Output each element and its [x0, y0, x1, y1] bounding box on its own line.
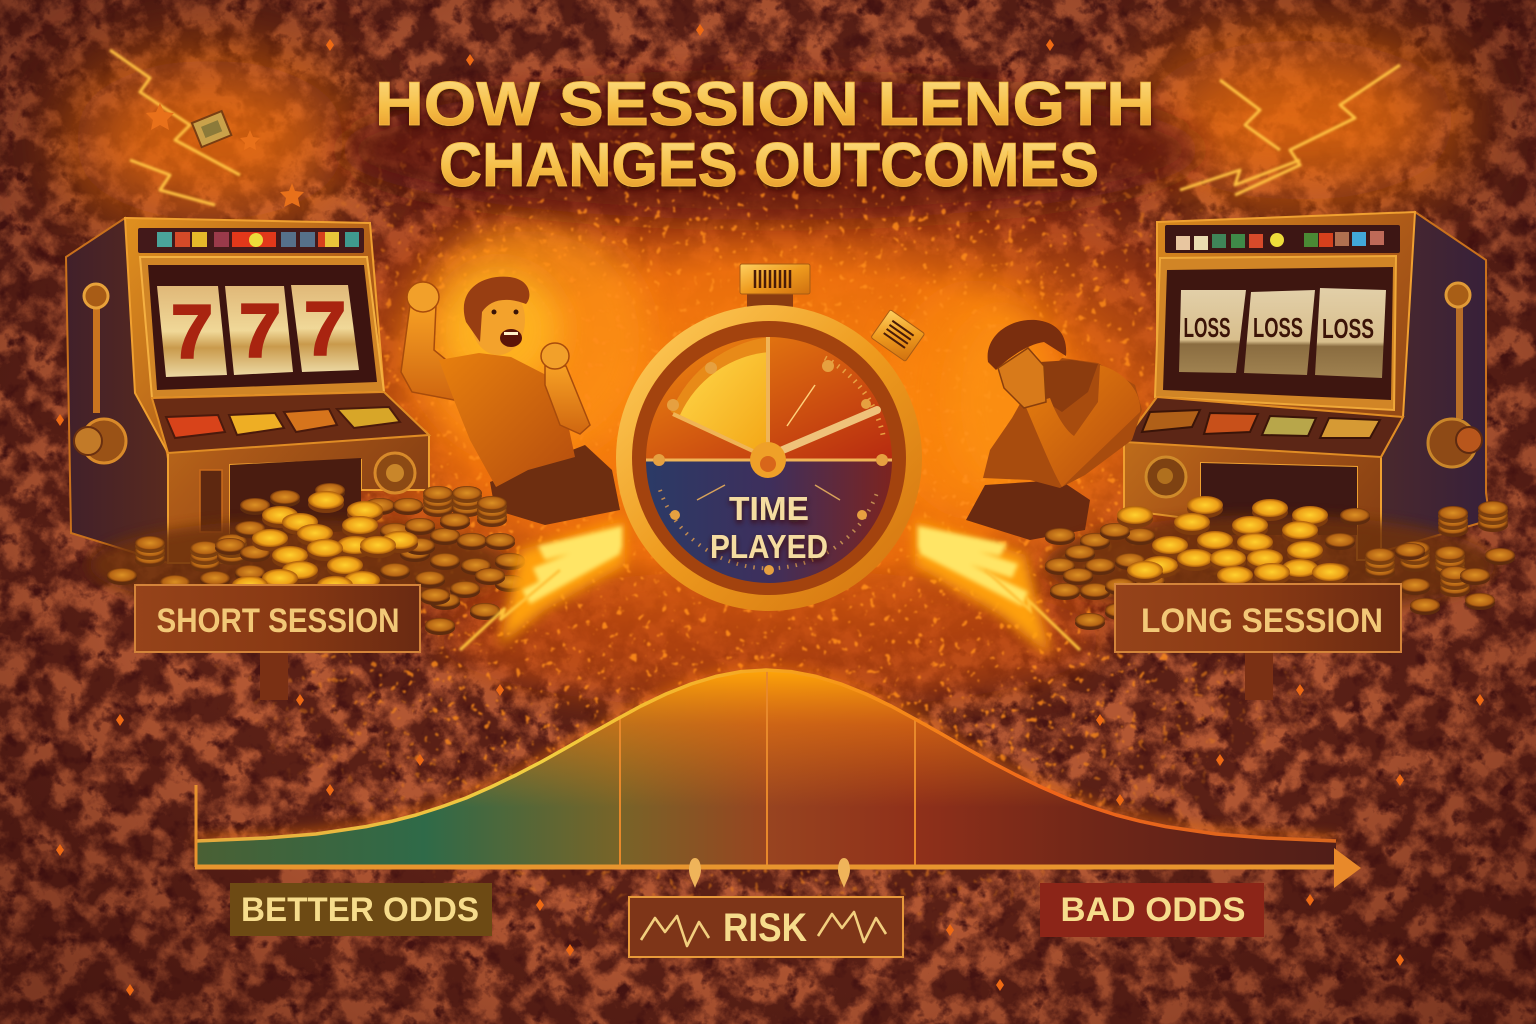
dial label: TIME — [729, 490, 809, 527]
dark coin opening — [230, 458, 361, 540]
side lever — [74, 284, 126, 463]
right arm — [545, 366, 590, 434]
risk range markers — [689, 858, 850, 888]
outer ring — [616, 305, 922, 611]
screen frame — [140, 257, 384, 398]
bent arm — [1025, 365, 1140, 487]
collar and face shadow — [1040, 360, 1098, 412]
flying banknote icon — [192, 111, 231, 147]
dial label: PLAYED — [710, 528, 828, 565]
long session sign — [1115, 584, 1401, 700]
bad odds label: BAD ODDS — [1060, 891, 1246, 929]
hands over face — [998, 348, 1046, 408]
console and buttons — [1124, 397, 1403, 457]
vertical axis — [194, 785, 198, 867]
cabinet front — [1124, 212, 1415, 560]
right coin pile — [1045, 496, 1515, 630]
legs — [966, 480, 1090, 540]
reels LOSS: LOSS — [1253, 312, 1303, 343]
curve glow — [196, 670, 1336, 841]
light strip — [1165, 225, 1400, 253]
base speaker knob — [375, 453, 415, 493]
reels 777: 7 — [171, 290, 213, 375]
risk bell curve chart — [195, 670, 1361, 888]
reels LOSS — [1179, 288, 1386, 378]
right slot machine — [1124, 212, 1490, 560]
console and buttons — [152, 392, 429, 453]
dial label — [710, 490, 828, 565]
title: CHANGES OUTCOMES — [439, 131, 1099, 200]
title: HOW SESSION LENGTH — [375, 70, 1155, 139]
cabinet side — [66, 218, 170, 563]
right losing player — [950, 310, 1142, 540]
light strip — [138, 228, 364, 253]
short session sign — [135, 585, 420, 700]
reels 777: 7 — [304, 287, 346, 372]
side lever — [1428, 283, 1482, 467]
cabinet side — [1360, 212, 1490, 553]
title — [375, 70, 1155, 200]
reels 777: 7 — [239, 289, 281, 374]
cabinet front — [125, 218, 429, 563]
minute hand — [778, 410, 877, 452]
zone dividers — [620, 670, 915, 866]
base speaker knob — [1146, 457, 1186, 497]
screen frame — [1155, 256, 1396, 410]
side button — [871, 310, 925, 362]
left slot machine — [66, 218, 429, 563]
head — [471, 285, 525, 355]
left coin pile — [90, 483, 525, 635]
crown — [740, 264, 810, 308]
better odds label: BETTER ODDS — [241, 891, 479, 929]
torso — [983, 358, 1142, 488]
short session sign: SHORT SESSION — [156, 602, 400, 640]
reels LOSS: LOSS — [1322, 313, 1374, 344]
torso — [439, 353, 575, 487]
time axis arrow — [195, 848, 1361, 888]
hair — [988, 320, 1066, 370]
bad odds label — [1040, 883, 1264, 937]
left winning player — [401, 270, 620, 525]
center pivot — [750, 442, 786, 478]
long session sign: LONG SESSION — [1141, 602, 1383, 640]
upper-corner lightning and stars — [110, 50, 1400, 207]
curve line — [196, 670, 1336, 841]
stopwatch — [616, 264, 925, 611]
better odds label — [230, 883, 492, 936]
reels LOSS: LOSS — [1184, 312, 1230, 343]
fiery sparks from stopwatch — [460, 520, 1080, 655]
risk label — [629, 897, 903, 957]
dial face — [646, 337, 892, 583]
risk label: RISK — [723, 906, 807, 950]
reels 777 — [157, 285, 359, 377]
legs — [490, 445, 620, 525]
curve fill — [196, 670, 1336, 866]
dark coin opening — [1201, 463, 1357, 535]
raised left arm — [401, 305, 456, 400]
